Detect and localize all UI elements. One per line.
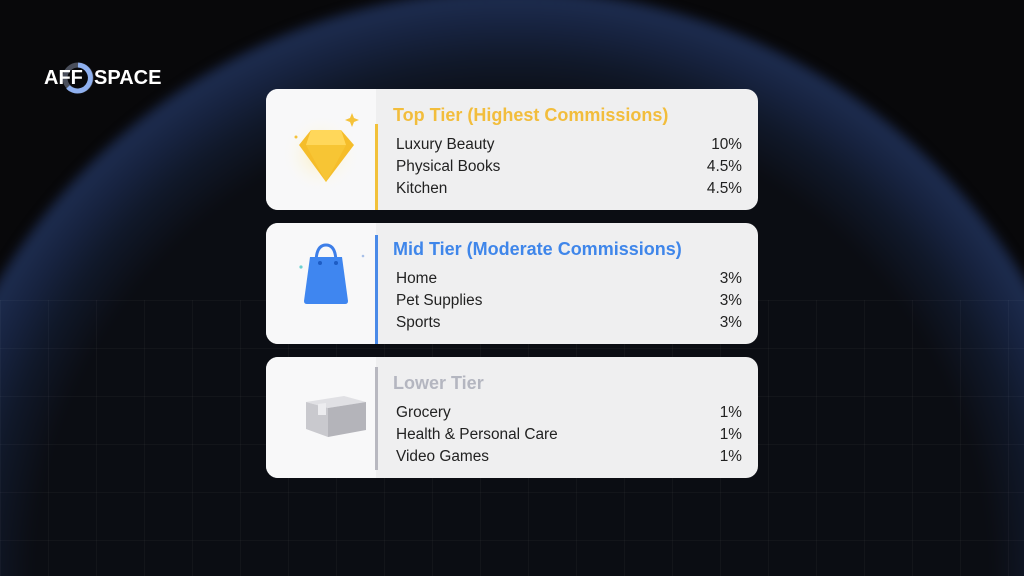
card: lower tier <box>266 357 758 478</box>
logo: SPACE <box>94 67 161 89</box>
card: mid tier: 3% <box>720 292 742 309</box>
card: lower tier: Health & Personal Care <box>396 426 558 443</box>
logo <box>44 62 161 94</box>
icon: box <box>266 357 376 478</box>
rows: 4.5% <box>707 158 742 175</box>
card: lower tier: 1% <box>720 404 742 421</box>
card: mid tier <box>266 223 758 344</box>
rows <box>396 136 742 197</box>
icon: diamond <box>266 89 376 210</box>
card: lower tier: Video Games <box>396 448 489 465</box>
card: mid tier: 3% <box>720 314 742 331</box>
rows: Physical Books <box>396 158 500 175</box>
card: mid tier: Mid Tier (Moderate Commissions) <box>393 239 682 259</box>
card: mid tier: 3% <box>720 270 742 287</box>
logo: AFF <box>44 67 83 89</box>
rows: Luxury Beauty <box>396 136 494 153</box>
rows: 4.5% <box>707 180 742 197</box>
card: lower tier: 1% <box>720 426 742 443</box>
card: lower tier: 1% <box>720 448 742 465</box>
card: lower tier: Lower Tier <box>393 373 484 393</box>
heading: Top Tier (Highest Commissions) <box>393 105 668 125</box>
card: mid tier: Sports <box>396 314 440 331</box>
card: lower tier: Grocery <box>396 404 451 421</box>
icon: bag <box>266 223 376 344</box>
card: mid tier: Home <box>396 270 437 287</box>
rows: Kitchen <box>396 180 447 197</box>
card: top tier <box>266 89 758 210</box>
card: mid tier: Pet Supplies <box>396 292 482 309</box>
rows: 10% <box>711 136 742 153</box>
